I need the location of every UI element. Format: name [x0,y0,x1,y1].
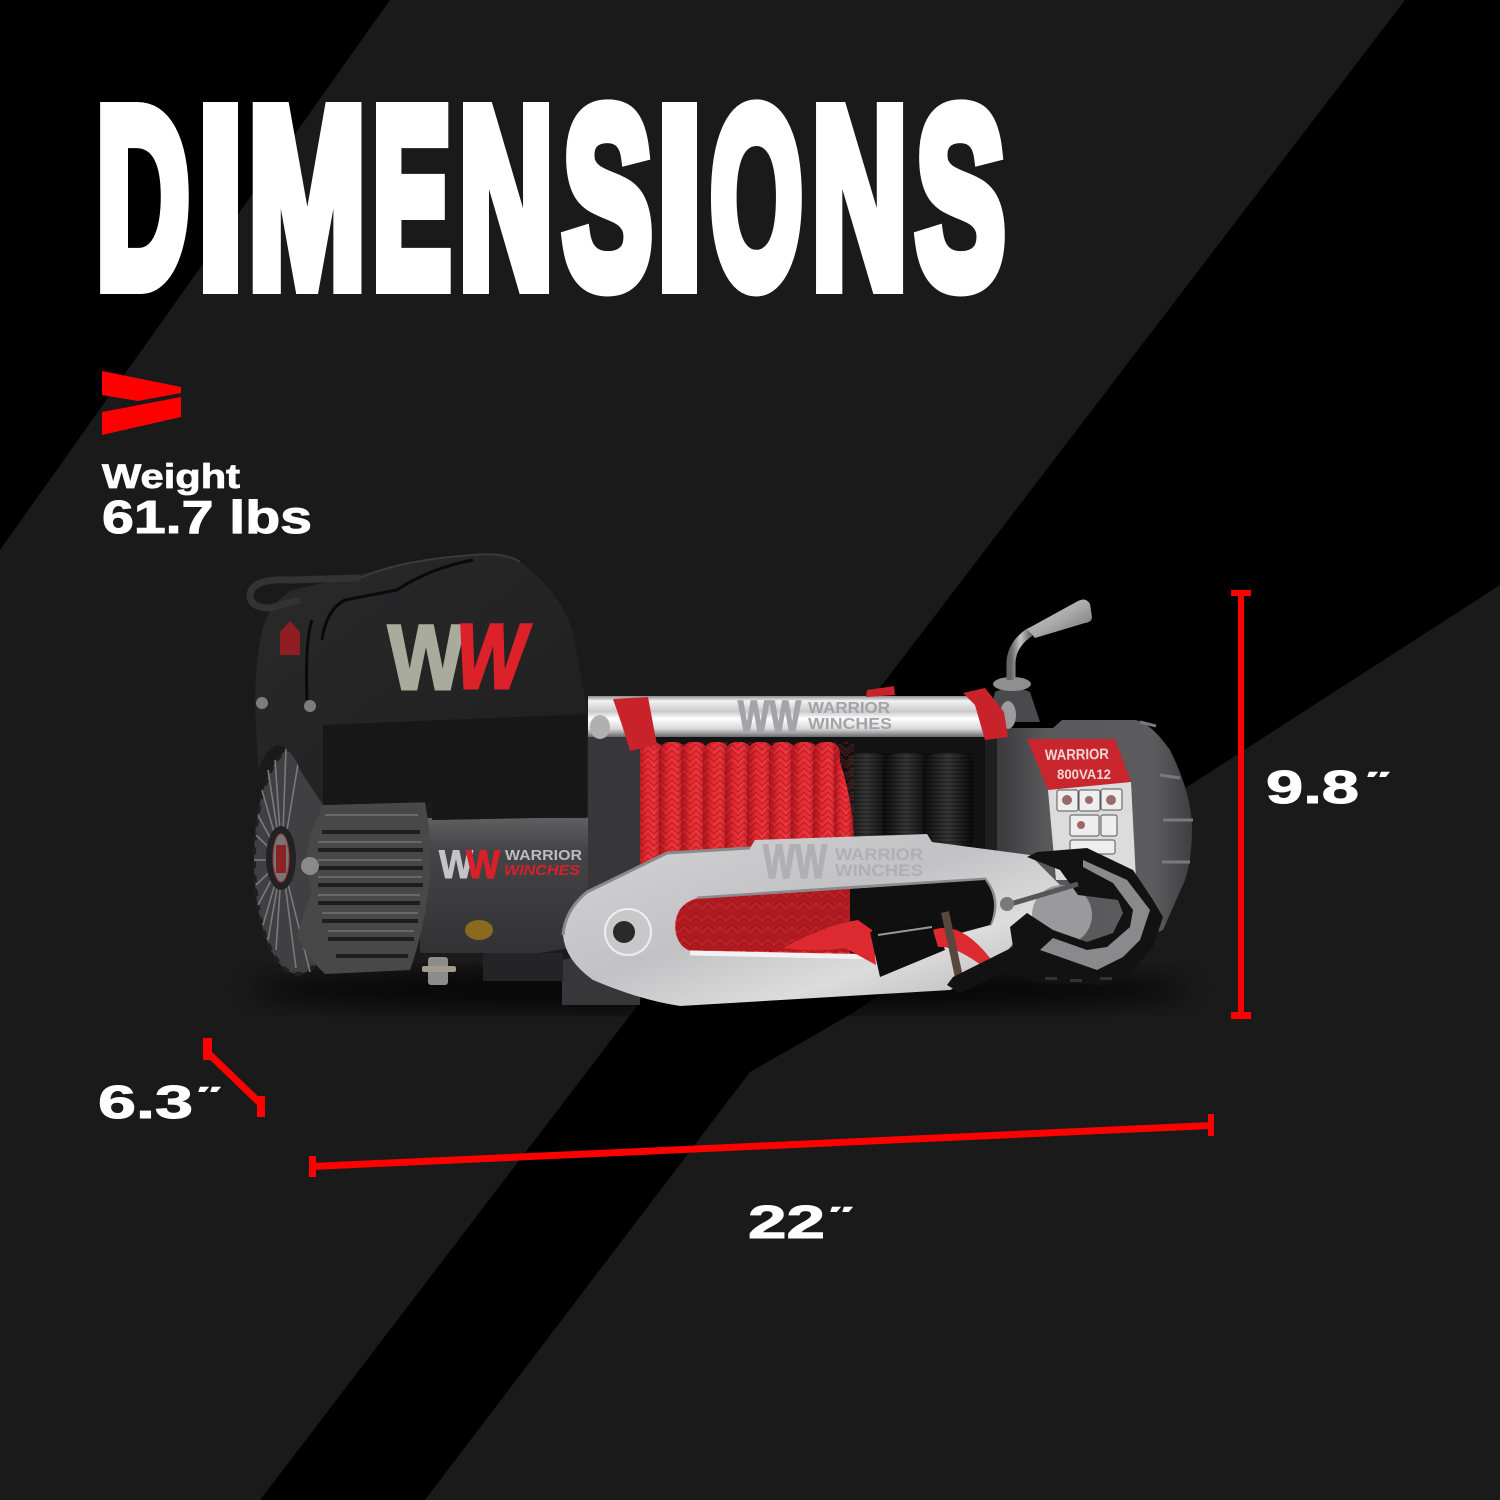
body logo: WARRIOR [505,847,582,864]
drum bearing behind hook [1032,885,1092,945]
cover logo [388,606,532,709]
depth label: ″ [197,1084,222,1104]
strap [250,578,360,608]
fairlead logo: WINCHES [835,861,923,880]
title: M [248,56,366,339]
fairlead logo: WW [763,836,827,889]
gearbox housing [985,720,1193,955]
title: N [812,56,907,339]
title: D [96,56,190,339]
black rope coils [843,753,973,853]
clutch handle [990,600,1092,722]
motor fins [297,802,430,974]
fan [254,746,342,974]
red clips [613,686,1008,751]
depth dimension line [203,1038,265,1117]
height label: ″ [1366,769,1391,789]
body logo [439,843,582,887]
icon: red chevron logo [102,371,181,435]
title: S [563,56,652,339]
title: E [372,56,451,339]
gearbox label: WARRIOR [1045,746,1109,764]
title: O [710,56,803,339]
body logo: W [439,843,473,887]
motor body [420,818,588,953]
body logo: WINCHES [504,862,580,879]
width label [748,1196,854,1248]
fairlead logo [763,836,923,889]
drum interior [636,730,996,965]
push to release tag [280,621,300,655]
screws [256,697,316,712]
title: I [657,56,702,339]
chrome tie bar [588,686,1016,751]
weight text: 61.7 lbs [102,491,312,543]
bolts and brass cap [422,920,563,985]
height label: 9.8 [1266,761,1359,813]
gearbox label: 800VA12 [1057,766,1111,782]
weight text [102,458,312,543]
winch product illustration [250,554,1193,1012]
title: N [459,56,553,339]
chrome tie bar: WINCHES [808,716,892,733]
motor cover [250,554,588,820]
frame end plate [562,712,640,1005]
width label: ″ [829,1204,854,1224]
chrome tie bar: WW [738,692,801,741]
fairlead logo: WARRIOR [835,845,923,864]
hook [947,848,1163,993]
cover logo: W [388,607,464,709]
ground shadow [250,968,1190,1012]
width dimension line [309,1114,1214,1177]
depth label: 6.3 [98,1076,193,1128]
title: I [198,56,243,339]
body logo: W [466,843,500,887]
gearbox label [1027,739,1136,880]
height dimension line [1231,590,1251,1019]
shackle [870,912,990,982]
rope eye end [783,920,876,965]
fairlead [563,834,1060,1006]
cover logo: W [456,606,532,708]
chrome tie bar: WARRIOR [808,700,890,717]
width label: 22 [748,1196,825,1248]
title: S [916,56,1005,339]
depth label [98,1076,222,1128]
weight text: Weight [102,458,240,496]
height label [1266,761,1391,813]
rope through slot [676,889,850,952]
red synthetic rope [637,742,854,968]
